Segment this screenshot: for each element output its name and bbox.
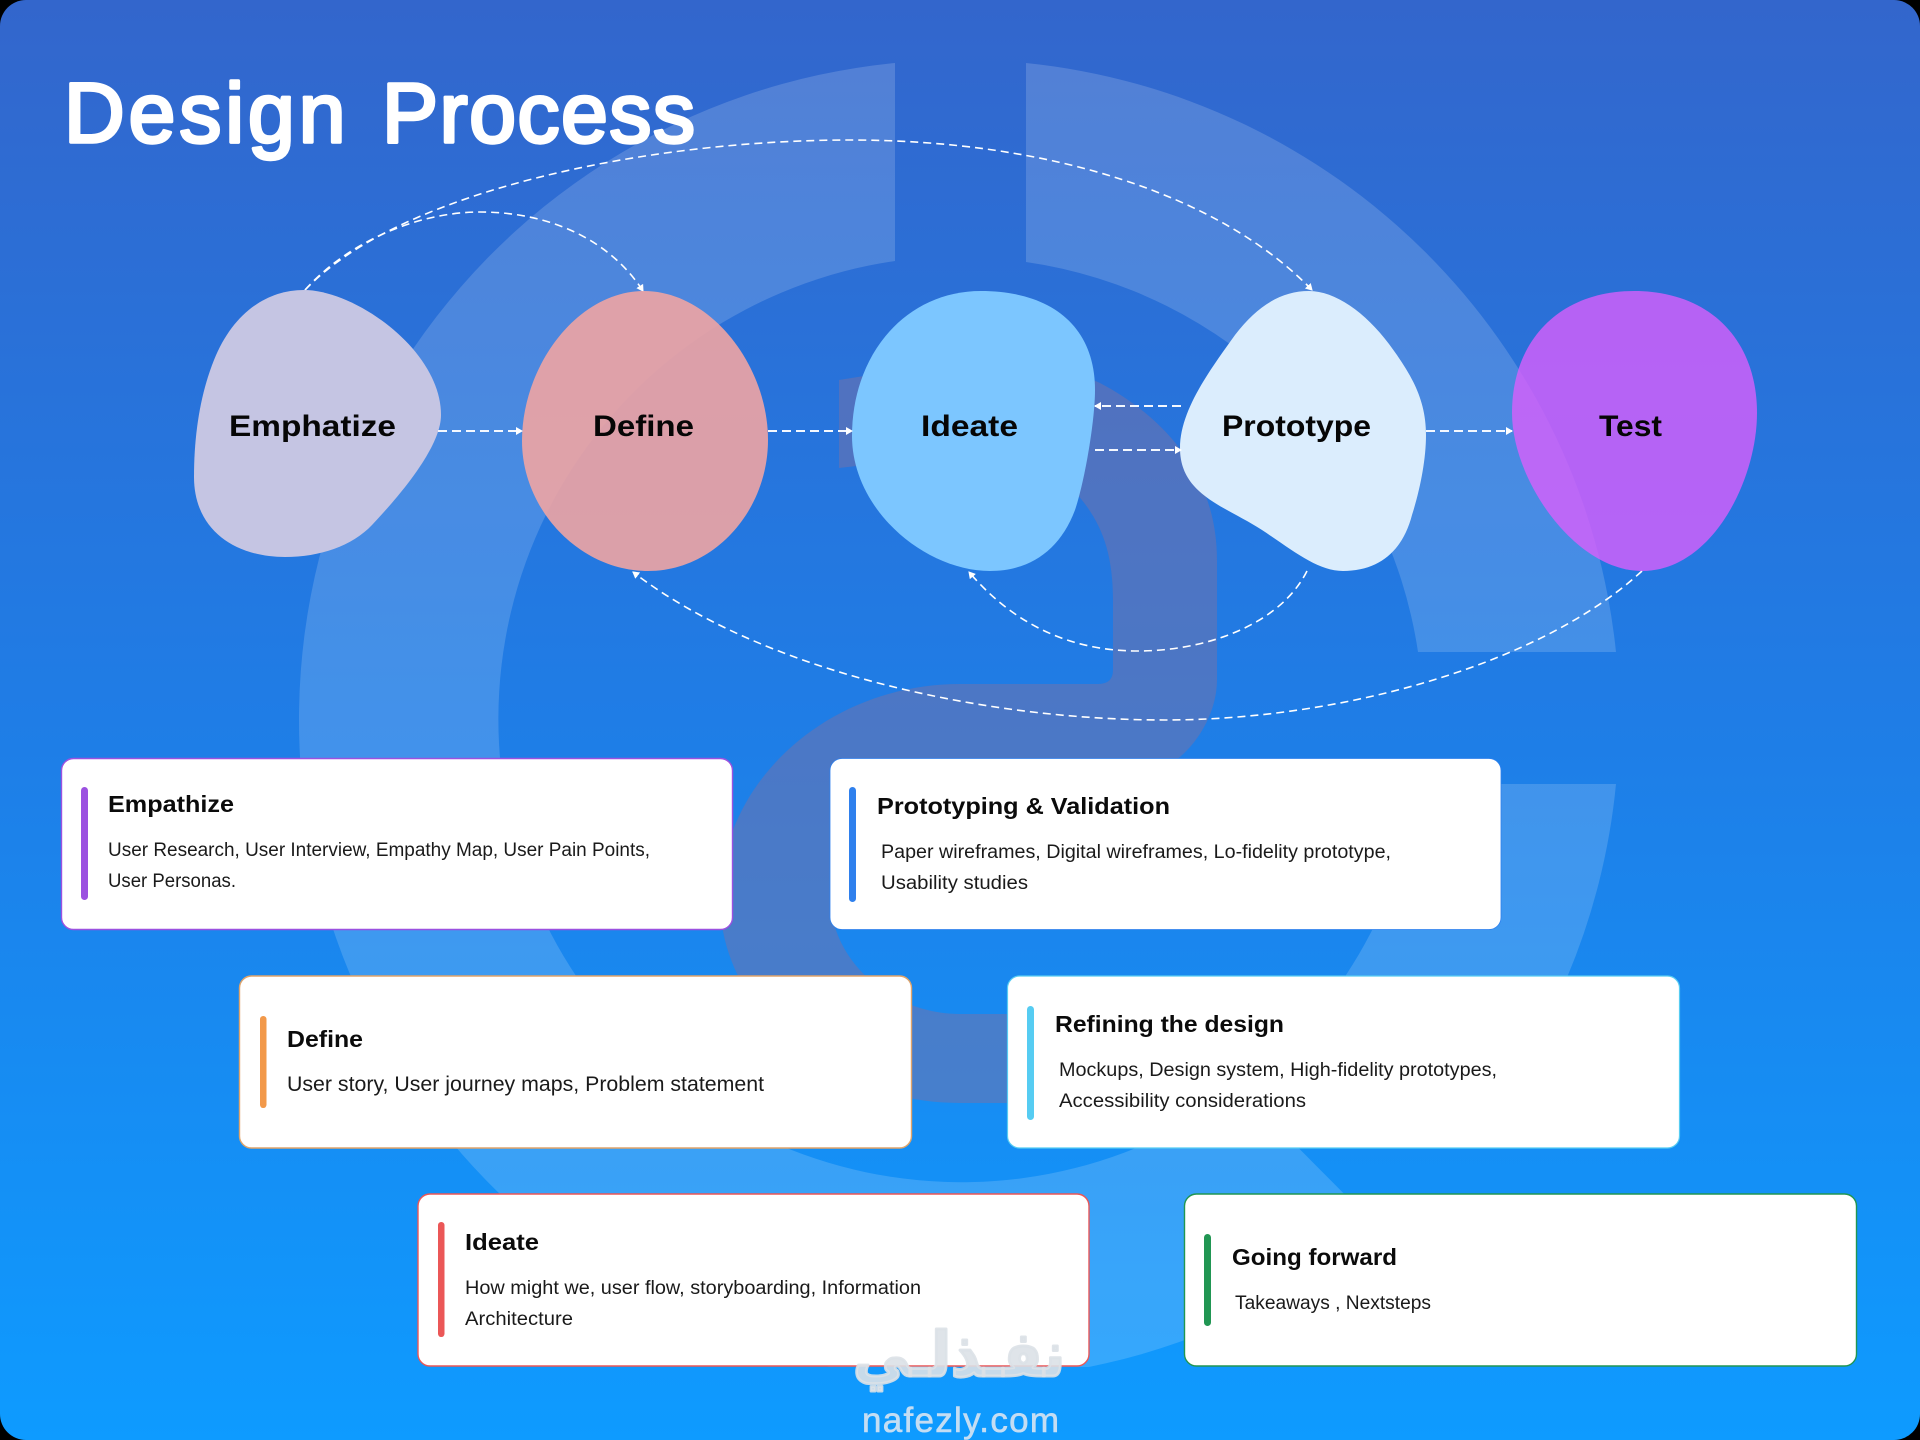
card body: Paper wireframes, Digital wireframes, Lo-fidelity prototype, xyxy=(881,842,1391,863)
card body: How might we, user flow, storyboarding, Information xyxy=(465,1278,921,1299)
blob: Emphatize: Emphatize xyxy=(229,410,396,443)
card body: Takeaways , Nextsteps xyxy=(1235,1293,1431,1314)
decorative ring: light logo band xyxy=(299,63,1616,1380)
card heading: Ideate xyxy=(465,1229,539,1255)
title: Process xyxy=(382,66,697,160)
card body xyxy=(881,842,1391,894)
arrow: Emphatize to Define xyxy=(438,430,522,432)
decorative shape: dark logo swirl xyxy=(720,365,1217,1103)
arrow: Ideate to Prototype xyxy=(1095,449,1181,451)
watermark: nafezly logo: nafezly.com xyxy=(862,1401,1059,1440)
blob: Prototype xyxy=(1180,291,1426,571)
blob: Test: Test xyxy=(1599,410,1662,443)
accent bar xyxy=(438,1222,444,1337)
accent bar xyxy=(260,1016,266,1108)
watermark: nafezly logo xyxy=(853,1318,1065,1440)
card body: Accessibility considerations xyxy=(1059,1091,1306,1112)
accent bar xyxy=(1027,1006,1034,1120)
card body xyxy=(108,840,650,892)
blob: Prototype: Prototype xyxy=(1222,410,1371,443)
watermark: nafezly logo: نفـذلـي xyxy=(853,1318,1065,1391)
card body: Architecture xyxy=(465,1309,573,1330)
card: Prototyping and Validation xyxy=(830,758,1501,930)
card heading: Empathize xyxy=(108,791,234,817)
card heading: Prototyping & Validation xyxy=(877,793,1170,819)
card: Refining the design xyxy=(1008,976,1680,1148)
card: Ideate xyxy=(418,1194,1089,1366)
card body: User story, User journey maps, Problem statement xyxy=(287,1073,764,1096)
card body xyxy=(465,1278,921,1330)
blob: Define: Define xyxy=(593,410,694,443)
card body: Usability studies xyxy=(881,873,1028,894)
arrow: Emphatize to Prototype arc xyxy=(305,140,1312,290)
card heading: Going forward xyxy=(1232,1244,1397,1270)
arrow: Test to Define arc xyxy=(633,571,1642,720)
arrow: Prototype back to Ideate xyxy=(1095,405,1181,407)
blob: Ideate xyxy=(852,291,1095,571)
accent bar xyxy=(849,787,856,902)
accent bar xyxy=(1204,1234,1211,1326)
accent bar xyxy=(81,787,88,900)
card: Empathize xyxy=(62,758,732,930)
arrow: Define to Ideate xyxy=(768,430,852,432)
blob: Define xyxy=(522,291,768,571)
card body: User Research, User Interview, Empathy Map, User Pain Points, xyxy=(108,840,650,861)
card body xyxy=(1059,1060,1497,1112)
blob: Emphatize xyxy=(194,290,441,557)
card body: User Personas. xyxy=(108,871,236,892)
card: Define xyxy=(240,976,912,1148)
card: Going forward xyxy=(1184,1194,1856,1366)
blob: Ideate: Ideate xyxy=(921,410,1018,443)
blob: Test xyxy=(1512,291,1757,571)
arrow: Emphatize to Define arc xyxy=(305,212,643,291)
card body: Mockups, Design system, High-fidelity prototypes, xyxy=(1059,1060,1497,1081)
card heading: Define xyxy=(287,1026,363,1052)
card heading: Refining the design xyxy=(1055,1011,1284,1037)
arrow: Prototype to Test xyxy=(1426,430,1512,432)
title: Design xyxy=(64,66,349,160)
arrow: Prototype to Ideate arc xyxy=(969,571,1307,651)
